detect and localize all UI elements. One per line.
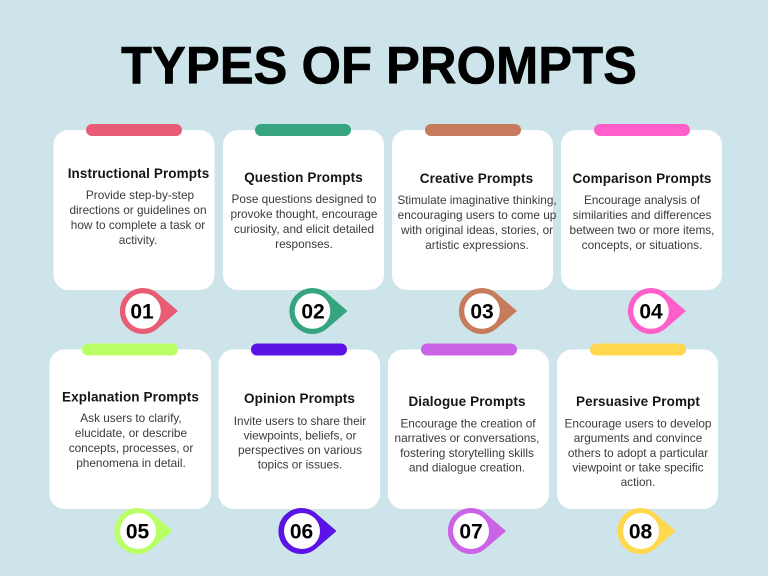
text: instructional prompts: activity.: [119, 233, 157, 247]
text: explanation prompts: Ask users to clarify,: [80, 411, 182, 425]
text: instructional prompts: Provide step-by-step: [86, 188, 195, 202]
heading: question prompts: Question Prompts: [244, 170, 363, 185]
panel: persuasive prompt: [557, 344, 718, 554]
badge 02: 02: [301, 300, 325, 324]
badge 06: 06: [290, 520, 313, 544]
heading: creative prompts: Creative Prompts: [420, 171, 533, 186]
text: comparison prompts: similarities and differences: [573, 208, 711, 222]
panel: instructional prompts: [54, 124, 214, 334]
text: opinion prompts: viewpoints, beliefs, or: [244, 428, 356, 442]
text: question prompts: Pose questions designed to: [232, 192, 377, 206]
heading: explanation prompts: Explanation Prompts: [62, 390, 199, 404]
heading: opinion prompts: Opinion Prompts: [244, 391, 355, 406]
badge 02: [289, 288, 348, 334]
text: question prompts: curiosity, and elicit detailed: [234, 222, 374, 236]
badge 08: 08: [629, 520, 652, 544]
text: creative prompts: Stimulate imaginative thinking,: [397, 193, 557, 207]
text: persuasive prompt: arguments and convince: [574, 431, 703, 445]
text: opinion prompts: Invite users to share their: [234, 414, 366, 428]
heading: dialogue prompts: Dialogue Prompts: [408, 394, 526, 409]
text: dialogue prompts: Encourage the creation of: [400, 416, 536, 430]
text: dialogue prompts: fostering storytelling skills: [400, 446, 534, 460]
text: dialogue prompts: narratives or conversations,: [395, 431, 539, 445]
text: persuasive prompt: action.: [621, 475, 655, 489]
badge 05: 05: [126, 520, 149, 544]
text: opinion prompts: perspectives on various: [238, 443, 362, 457]
text: creative prompts: artistic expressions.: [425, 238, 529, 252]
panel: comparison prompts: [561, 124, 722, 334]
badge 03: [459, 288, 517, 334]
badge 01: [120, 288, 178, 334]
text: instructional prompts: how to complete a task or: [71, 218, 205, 232]
badge 01: 01: [130, 300, 154, 324]
text: dialogue prompts: and dialogue creation.: [409, 460, 525, 474]
panel: explanation prompts: [50, 344, 211, 554]
badge 08: [617, 508, 676, 554]
text: creative prompts: with original ideas, stories, or: [400, 223, 553, 237]
text: explanation prompts: phenomena in detail.: [76, 456, 186, 470]
badge 04: [628, 288, 686, 334]
heading: comparison prompts: Comparison Prompts: [572, 171, 712, 186]
title: TYPES OF PROMPTS: [121, 36, 637, 96]
heading: instructional prompts: Instructional Prompts: [68, 166, 209, 181]
panel: opinion prompts: [218, 344, 380, 554]
panel: question prompts: [223, 124, 384, 334]
text: comparison prompts: Encourage analysis of: [584, 193, 701, 207]
text: comparison prompts: concepts, or situations.: [582, 238, 702, 252]
badge 04: 04: [639, 300, 663, 324]
text: opinion prompts: topics or issues.: [258, 458, 342, 472]
badge 06: [278, 508, 336, 554]
text: persuasive prompt: others to adopt a particular: [568, 446, 708, 460]
text: explanation prompts: elucidate, or describe: [75, 426, 188, 440]
text: persuasive prompt: Encourage users to develop: [565, 416, 712, 430]
heading: persuasive prompt: Persuasive Prompt: [576, 394, 700, 409]
text: explanation prompts: concepts, processes, or: [69, 441, 193, 455]
badge 07: 07: [459, 520, 483, 544]
badge 03: 03: [470, 300, 494, 324]
text: instructional prompts: directions or guidelines on: [69, 203, 207, 217]
text: question prompts: provoke thought, encourage: [231, 207, 378, 221]
badge 05: [114, 508, 172, 554]
panel: dialogue prompts: [388, 344, 549, 554]
badge 07: [448, 508, 506, 554]
text: persuasive prompt: viewpoint or take specific: [572, 460, 704, 474]
text: comparison prompts: between two or more items,: [570, 223, 714, 237]
panel: creative prompts: [392, 124, 557, 334]
text: creative prompts: encouraging users to come up: [398, 208, 557, 222]
text: question prompts: responses.: [275, 237, 333, 251]
